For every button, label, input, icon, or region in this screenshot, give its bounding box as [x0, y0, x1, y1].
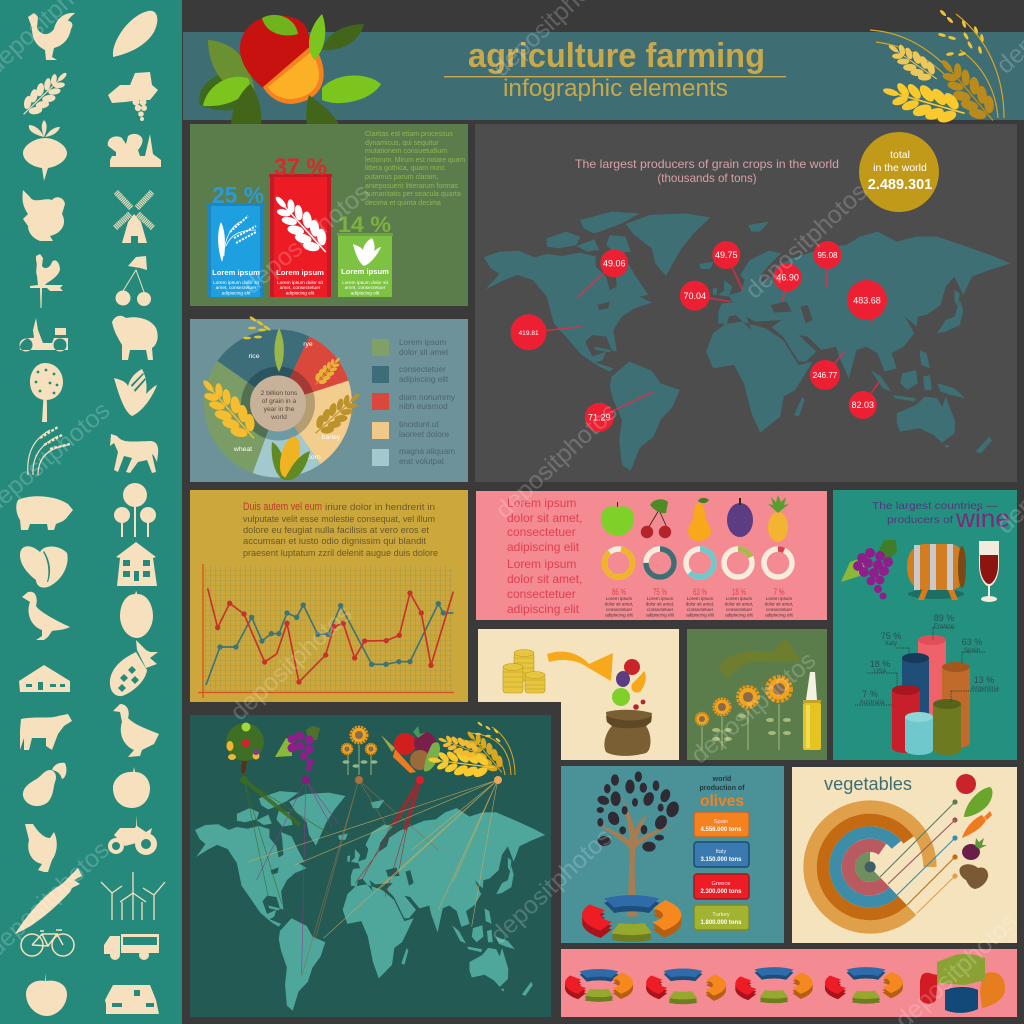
- bar: rice 25 percent: Lorem ipsum dolor sit: [213, 280, 260, 286]
- text block: claritas paragraph: [365, 131, 465, 207]
- cylinder: Spain: [942, 662, 970, 748]
- icon: tree: [30, 363, 63, 422]
- icon: wind turbines: [101, 872, 165, 920]
- ring values: [612, 587, 784, 597]
- icon: oil bottle: [803, 672, 821, 750]
- bubble values: 46.90: [776, 272, 799, 282]
- cylinder labels: 89 %: [934, 613, 954, 623]
- label: Greece: 2.300.000 tons: [700, 889, 742, 895]
- icon set: left column: [15, 13, 82, 1016]
- bubble connectors: [529, 255, 879, 417]
- icon: grape leaf bunch: [108, 72, 158, 121]
- bubble values: 71.29: [588, 412, 611, 422]
- bar: rice 25 percent: adipiscing elit: [222, 290, 251, 296]
- text block: claritas paragraph: humanitatis per seacula quarta: [365, 191, 461, 198]
- icon: wheat on donut: [191, 370, 266, 449]
- ring captions: Lorem ipsum: [606, 596, 632, 601]
- donut labels: [233, 341, 341, 461]
- bubble values: [519, 250, 881, 422]
- bar: corn 14 percent: 14 %: [338, 212, 391, 237]
- watermark: depositphotos: [238, 178, 375, 300]
- donut labels: wheat: [233, 446, 252, 453]
- text block: claritas paragraph: Claritas est etiam processus: [365, 131, 453, 138]
- icon: wheat header bouquet: [870, 9, 1006, 131]
- text block: duis autem: [243, 501, 438, 558]
- text block: duis autem: Duis autem vel eum: [243, 501, 322, 513]
- ring captions: adipiscing elit: [605, 612, 634, 618]
- text block: claritas paragraph: mutationem consuetudium: [365, 148, 447, 155]
- arrow: sunflower to oil: [718, 638, 801, 679]
- icon: tractor: [108, 815, 157, 855]
- cylinder: Argentina: [933, 699, 961, 755]
- icon: wine glass: [979, 541, 999, 602]
- data bubbles: [511, 241, 887, 432]
- total callout: 2.489.301: [868, 177, 932, 193]
- label: Italy: [694, 842, 749, 867]
- text block: lorem ipsum: consectetuer: [507, 587, 576, 601]
- text block: claritas paragraph: dynamicus, qui sequitur: [365, 140, 439, 147]
- icon: apple: [26, 973, 67, 1016]
- ring captions: Lorem ipsum: [726, 596, 752, 601]
- icon: fruit and leaves logo: [199, 14, 381, 147]
- panel: wine producers: [833, 490, 1017, 760]
- panel: line chart: [190, 490, 468, 702]
- ring values: 86 %: [612, 587, 626, 597]
- bubble values: 49.06: [603, 258, 626, 268]
- bar: rice 25 percent: [206, 182, 265, 297]
- icon: cucumber: [113, 11, 157, 57]
- icon: rye on donut: [310, 352, 346, 390]
- panel: world production map: [190, 715, 551, 1017]
- ring captions: dolor sit amet,: [646, 602, 674, 606]
- icon: cow: [20, 714, 72, 750]
- heading: vegetables: [824, 773, 912, 794]
- ring captions: adipiscing elit: [646, 612, 675, 618]
- panel: icon sidebar: [0, 0, 182, 1024]
- title rule: [444, 76, 786, 77]
- icon: tomato: [956, 774, 976, 794]
- world map: [195, 791, 545, 1011]
- cut-out details in sidebar icons: [24, 342, 157, 1007]
- chart: ring two: [646, 968, 726, 1004]
- header band: [183, 32, 1024, 120]
- icon: sunflowers: [114, 483, 156, 537]
- donut labels: rice: [249, 353, 260, 360]
- subtitle: infographic elements: [503, 75, 728, 102]
- icon: goose two: [113, 704, 159, 757]
- text block: duis autem: dolore eu feugiat nulla facilisis at vero eros et: [243, 525, 430, 535]
- label: Spain: [694, 812, 749, 837]
- cylinder labels: 13 %: [974, 675, 994, 685]
- watermark: depositphotos: [485, 823, 618, 949]
- panel: olives: [561, 766, 784, 943]
- icon: grapes: [841, 540, 897, 600]
- donut labels: barley: [322, 434, 341, 441]
- ring captions: consectetuer: [726, 607, 753, 612]
- leader lines: [855, 627, 999, 705]
- watermark: depositphotos: [686, 646, 821, 770]
- chart: ring three: [735, 967, 813, 1003]
- icon: coin stacks: [503, 650, 545, 693]
- icon: fruit tree: [226, 722, 264, 773]
- label: Turkey: Turkey: [712, 912, 730, 918]
- world map: [484, 212, 1011, 471]
- icon: pig: [16, 496, 73, 530]
- icon: rooster: [28, 13, 75, 60]
- text block: lorem ipsum: dolor sit amet,: [507, 511, 582, 525]
- legend: dolor sit amet: [399, 348, 449, 357]
- icon: bicycle: [21, 930, 74, 956]
- ring captions: consectetuer: [687, 607, 714, 612]
- legend: Lorem ipsum: [399, 338, 447, 347]
- cylinder: France: [918, 635, 946, 735]
- icon: plum: [727, 498, 753, 537]
- icon: corn on donut: [272, 434, 310, 480]
- leader dots: [952, 799, 958, 879]
- bar: wheat 37 percent: [264, 154, 338, 297]
- icon: cucumber: [964, 787, 992, 817]
- icon: barley on donut: [307, 385, 367, 443]
- text block: lorem ipsum: [507, 496, 582, 616]
- map heading: The largest producers of grain crops in the world: [575, 158, 839, 171]
- legend: nibh euismod: [399, 402, 448, 411]
- legend: erat volutpat: [399, 457, 445, 466]
- ring captions: Lorem ipsum: [766, 596, 792, 601]
- title: agriculture farming: [468, 37, 765, 75]
- panel: sunflower to oil: [687, 629, 827, 760]
- icon: round fruit: [113, 767, 150, 808]
- bubble values: 419.81: [519, 330, 539, 337]
- chart: ring four: [825, 967, 903, 1004]
- watermark: depositphotos: [490, 398, 623, 524]
- panel: ring variations: [561, 949, 1017, 1017]
- watermark: depositphotos: [225, 600, 358, 726]
- icon: sheep: [112, 316, 158, 360]
- label: Greece: [694, 874, 749, 899]
- legend: consectetuer: [399, 365, 446, 374]
- bar: corn 14 percent: Lorem ipsum dolor sit: [342, 280, 389, 286]
- donut labels: rye: [303, 341, 313, 348]
- olives heading: production of: [699, 785, 745, 792]
- panel: grain pie chart: [190, 316, 468, 482]
- text block: lorem ipsum: dolor sit amet,: [507, 572, 582, 586]
- bar: wheat 37 percent: 37 %: [274, 154, 327, 181]
- chart: ring one: [565, 969, 633, 1002]
- panel: vegetables: [792, 767, 1017, 943]
- icon: rice stalk: [28, 427, 70, 475]
- icon: beet: [962, 838, 987, 860]
- icon: potatoes: [959, 864, 988, 889]
- ring captions: dolor sit amet,: [725, 602, 753, 606]
- cylinder labels: [859, 613, 999, 706]
- bar: wheat 37 percent: adipiscing elit: [286, 290, 315, 296]
- bar: wheat 37 percent: Lorem ipsum dolor sit: [277, 280, 324, 286]
- connector lines: [244, 780, 498, 977]
- olives heading: world: [712, 776, 731, 783]
- bubble values: 483.68: [853, 296, 881, 306]
- bar: corn 14 percent: adipiscing elit: [351, 290, 380, 296]
- ring values: 18 %: [732, 587, 746, 597]
- bubble values: 70.04: [684, 291, 706, 301]
- ring captions: adipiscing elit: [765, 612, 794, 618]
- chart: progress rings: [602, 547, 792, 579]
- bar: wheat 37 percent: Lorem ipsum: [276, 268, 324, 277]
- bubble values: 82.03: [852, 400, 874, 410]
- cylinder labels: 75 %: [881, 631, 901, 641]
- icon: cottage: [105, 985, 159, 1014]
- icon: goose: [22, 592, 70, 640]
- panel: bar chart percentages: [190, 124, 468, 306]
- icon: wheat bouquet: [427, 721, 515, 782]
- icon: sack: [604, 710, 652, 756]
- legend: laoreet dolore: [399, 430, 450, 439]
- icon: windmill: [115, 192, 153, 243]
- chart: 3d cylinders: [855, 613, 999, 755]
- cylinder labels: 63 %: [962, 637, 982, 647]
- icon: barn: [19, 665, 70, 692]
- text block: claritas paragraph: decima et quinta decima: [365, 200, 441, 207]
- legend: diam nonummy: [399, 393, 456, 402]
- wine heading: [872, 500, 1010, 533]
- bubble values: 95.08: [817, 251, 838, 260]
- icon: pear: [688, 498, 711, 541]
- legend: adipiscing elit: [399, 375, 449, 384]
- ring captions: consectetuer: [647, 607, 674, 612]
- legend: magna aliquam: [399, 447, 455, 456]
- text block: claritas paragraph: lectorum. Mirum est notare quam: [365, 157, 465, 164]
- icon: falling fruit: [612, 659, 646, 710]
- label: Italy: 3.150.000 tons: [700, 857, 742, 863]
- icon: chicken: [25, 824, 57, 872]
- cylinder labels: 7 %: [862, 689, 878, 699]
- total callout: [859, 132, 939, 212]
- icon: grapes: [275, 726, 320, 771]
- label: Turkey: 1.800.000 tons: [700, 920, 742, 926]
- icon: truck: [104, 934, 159, 960]
- map heading: [575, 158, 839, 185]
- text block: lorem ipsum: consectetuer: [507, 525, 576, 539]
- legend: tincidunt ut: [399, 420, 439, 429]
- label: Spain: Spain: [714, 819, 728, 825]
- bar: rice 25 percent: amet, consectetuer: [216, 285, 257, 291]
- cylinder labels: Italy: [885, 640, 898, 647]
- cylinder labels: Argentina: [971, 685, 999, 692]
- watermark: depositphotos: [740, 178, 873, 304]
- icon: corn: [114, 369, 157, 416]
- chart: olive ring: [582, 895, 681, 942]
- icon: carrot: [15, 868, 82, 934]
- ring values: 75 %: [653, 587, 667, 597]
- ring captions: adipiscing elit: [686, 612, 715, 618]
- text block: claritas paragraph: anteposuerit litterarum formas: [365, 183, 458, 190]
- cylinder labels: Australia: [859, 699, 885, 706]
- arrow: coins to fruit: [547, 652, 613, 681]
- icon set: right column: [101, 11, 165, 1014]
- cylinder labels: 18 %: [870, 659, 890, 669]
- ring captions: consectetuer: [766, 607, 793, 612]
- bar: wheat 37 percent: amet, consectetuer: [280, 285, 321, 291]
- ring captions: consectetuer: [606, 607, 633, 612]
- wine heading: wine: [955, 505, 1010, 533]
- map heading: (thousands of tons): [657, 172, 757, 185]
- donut center text: of grain in a: [262, 398, 297, 405]
- chart: exploded ring: [920, 954, 1005, 1013]
- cylinder labels: USA: [873, 668, 887, 675]
- icon: sunflowers: [342, 727, 378, 775]
- label: Italy: Italy: [716, 849, 726, 855]
- icon: pineapple: [768, 495, 789, 542]
- icon: vegetables: [381, 726, 440, 773]
- label: Greece: Greece: [711, 881, 731, 887]
- panel: world map of grain producers: [475, 124, 1017, 482]
- total callout: in the world: [873, 162, 927, 174]
- text block: duis autem: vulputate velit esse molestie consequat, vel illum: [243, 514, 435, 524]
- icon: beet: [23, 120, 67, 181]
- donut labels: corn: [307, 454, 321, 461]
- wine heading: The largest countries —: [872, 500, 999, 512]
- icon: green apple: [601, 502, 634, 536]
- ring captions: [605, 596, 794, 618]
- chart: two series line chart: [198, 564, 454, 698]
- text block: claritas paragraph: putamus parum claram,: [365, 174, 439, 181]
- icon: barrel: [907, 544, 966, 600]
- icon: pear: [23, 763, 66, 806]
- olives heading: [699, 776, 745, 810]
- donut center text: [261, 390, 298, 421]
- bubble values: 246.77: [813, 371, 838, 380]
- cylinder labels: Spain: [964, 647, 981, 654]
- icon: pineapple: [110, 640, 158, 696]
- icon: wheat ear: [15, 64, 75, 124]
- donut center text: year in the: [264, 406, 295, 413]
- label: Turkey: [694, 905, 749, 930]
- icon: plum: [120, 591, 153, 638]
- source dots: [240, 776, 502, 784]
- icon: garden: [108, 134, 161, 167]
- bar: corn 14 percent: amet, consectetuer: [345, 285, 386, 291]
- olives heading: olives: [700, 793, 744, 810]
- text block: duis autem: accumsan et iusto odio dignissim qui blandit: [243, 536, 427, 546]
- text block: lorem ipsum: adipiscing elit: [507, 540, 580, 554]
- bubble values: 49.75: [715, 250, 738, 260]
- leader lines: [880, 802, 955, 913]
- ring captions: dolor sit amet,: [765, 602, 793, 606]
- icon: weather vane: [30, 254, 63, 308]
- icon: cherry leaf: [128, 256, 147, 270]
- legend: [372, 338, 456, 466]
- ring captions: Lorem ipsum: [647, 596, 673, 601]
- bar: corn 14 percent: [337, 212, 393, 297]
- icon: carrot: [962, 811, 992, 838]
- text block: duis autem: iriure dolor in hendrerit in: [325, 502, 435, 512]
- label: Spain: 4.556.000 tons: [700, 827, 742, 833]
- ring captions: dolor sit amet,: [686, 602, 714, 606]
- chart: grain donut: [204, 329, 352, 477]
- bar: rice 25 percent: Lorem ipsum: [212, 268, 260, 277]
- cylinder: Australia: [905, 712, 933, 755]
- text block: lorem ipsum: Lorem ipsum: [507, 496, 576, 510]
- text block: lorem ipsum: adipiscing elit: [507, 602, 580, 616]
- text block: lorem ipsum: Lorem ipsum: [507, 557, 576, 571]
- wine heading: producers of: [887, 514, 953, 526]
- icon: rice on donut: [243, 316, 284, 372]
- chart: concentric rings: [810, 807, 930, 927]
- donut center text: world: [270, 414, 287, 421]
- icon: turkey: [23, 190, 65, 241]
- cylinder: USA: [892, 685, 920, 753]
- icon: horse: [110, 434, 158, 473]
- icon: cherries: [641, 499, 671, 538]
- icon: cherries fruit: [116, 270, 151, 306]
- text block: duis autem: praesent luptatum zzril delenit augue duis dolore: [243, 548, 438, 558]
- ring captions: adipiscing elit: [725, 612, 754, 618]
- icon: potatoes: [20, 546, 68, 588]
- cylinder labels: France: [934, 623, 954, 630]
- bar: rice 25 percent: 25 %: [212, 182, 264, 208]
- icon: scooter: [20, 318, 68, 352]
- ring values: 7 %: [774, 587, 784, 597]
- total callout: total: [890, 149, 910, 161]
- ring values: 63 %: [693, 587, 707, 597]
- bar: corn 14 percent: Lorem ipsum: [341, 267, 389, 276]
- text block: claritas paragraph: littera gothica, quam nunc: [365, 165, 446, 172]
- icon: house: [116, 542, 157, 586]
- ring captions: dolor sit amet,: [605, 602, 633, 606]
- icon: sunflower row: [696, 678, 791, 750]
- icon: olive tree: [596, 771, 681, 917]
- title block: [444, 37, 786, 102]
- cylinder: Italy: [902, 653, 929, 735]
- panel: fruit percentages: [476, 491, 827, 620]
- panel: coins to fruit: [478, 629, 679, 760]
- ring captions: Lorem ipsum: [687, 596, 713, 601]
- donut center text: 2 billion tons: [261, 390, 298, 397]
